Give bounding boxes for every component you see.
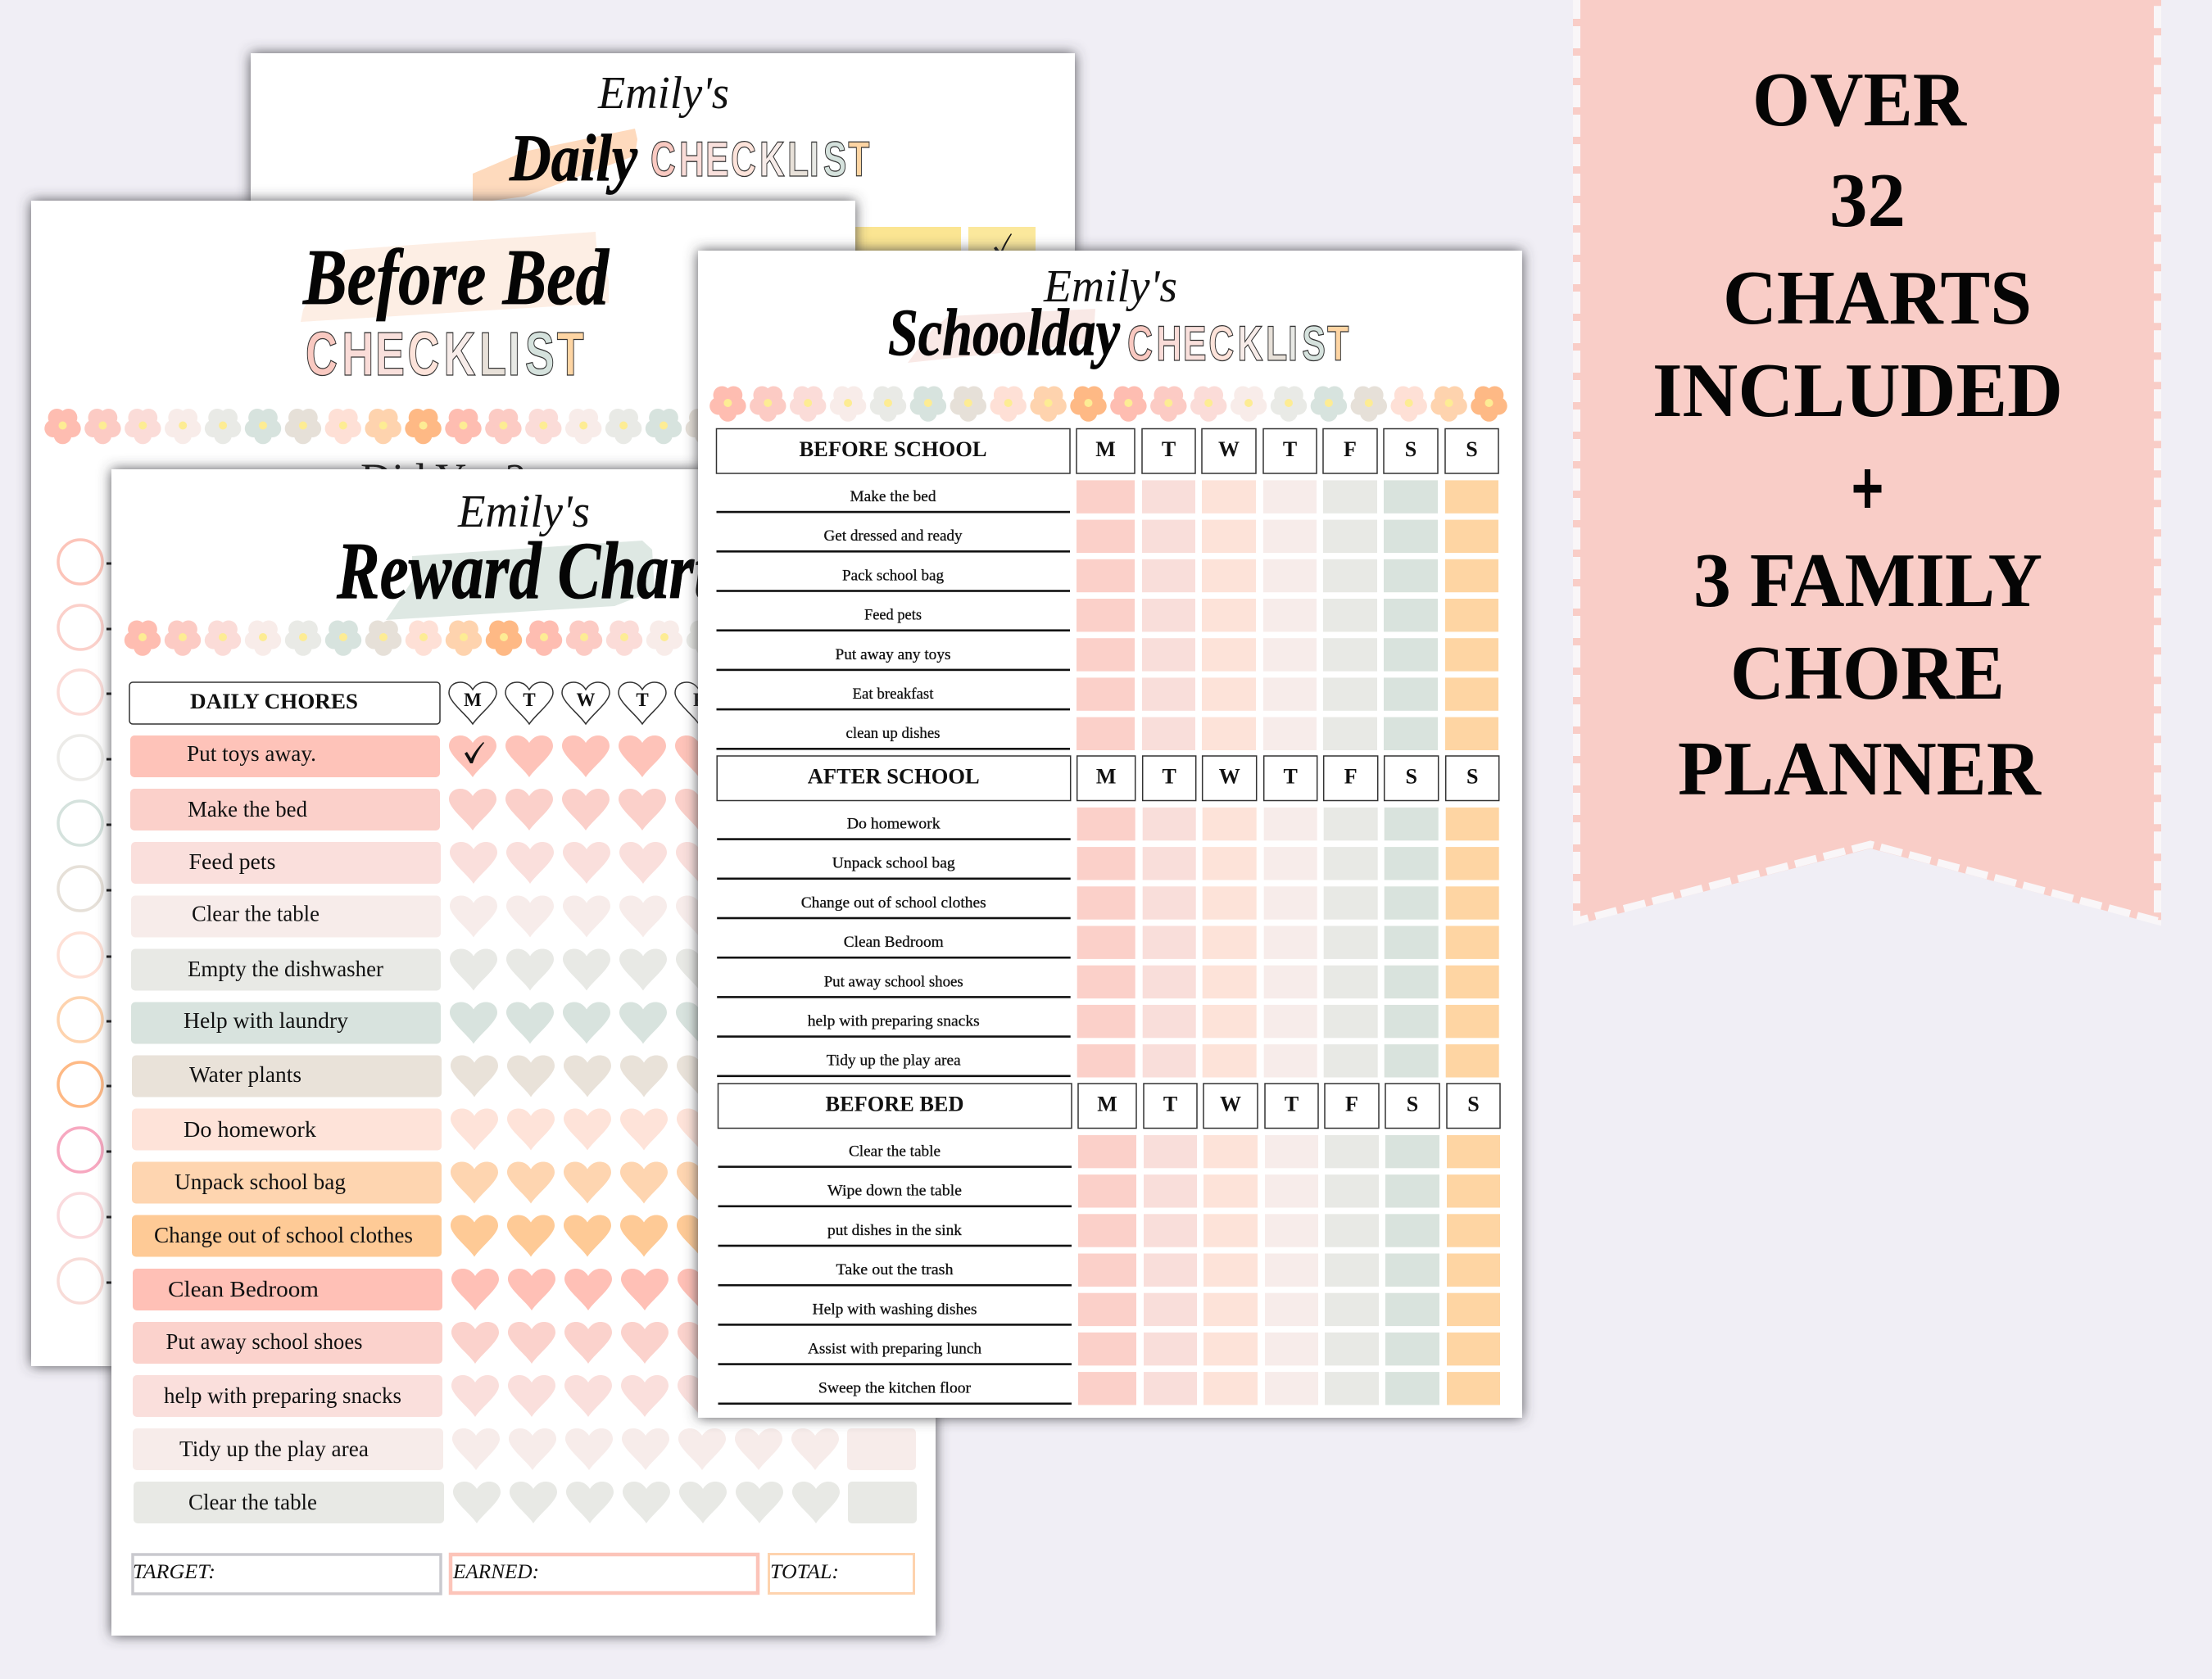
- flower border: Reward chart: [122, 617, 725, 656]
- sheet: Schoolday checklist: [698, 251, 1522, 1418]
- brush stroke: Before Bed: [301, 232, 609, 322]
- section: Before Bed: Assist with preparing lunch: [808, 1340, 981, 1358]
- section: Before School: M: [1095, 437, 1116, 461]
- row: Change out of school clothes: Change out of school clothes: [154, 1223, 413, 1247]
- row: Water plants: [132, 1055, 724, 1097]
- row: Clear the table (last): [134, 1482, 917, 1523]
- row: Do homework: Do homework: [184, 1117, 317, 1142]
- sheet: Daily checklist: [251, 53, 1075, 872]
- section: Before Bed: S: [1467, 1093, 1480, 1116]
- row: Change out of school clothes: [132, 1215, 724, 1256]
- ribbon text: +: [1852, 446, 1883, 532]
- ribbon text: CHARTS: [1723, 256, 2032, 341]
- section: After School: F: [1344, 765, 1358, 788]
- section: Before Bed: Sweep the kitchen floor: [818, 1380, 972, 1397]
- section: Before Bed: T: [1163, 1093, 1177, 1116]
- section: After School: Clean Bedroom: [844, 934, 944, 951]
- row: Put away school shoes: Put away school shoes: [165, 1329, 362, 1354]
- row: help with preparing snacks: [133, 1375, 725, 1417]
- heading: Reward Chart: Reward Chart: [336, 525, 714, 616]
- section: Before School: Pack school bag: [842, 567, 944, 584]
- section: After School: S: [1405, 765, 1417, 788]
- section: After School: W: [1219, 765, 1240, 788]
- section: Before School: S: [1466, 437, 1478, 461]
- section: Before Bed: [718, 1084, 1500, 1405]
- heading: Schoolday: Schoolday: [888, 295, 1120, 369]
- section: Before School: Feed pets: [864, 607, 922, 624]
- name: Emily's on Daily: Emily's: [597, 68, 729, 119]
- row: Empty the dishwasher: [131, 948, 723, 991]
- section: Before Bed: Clear the table: [849, 1143, 941, 1160]
- flower border: Schoolday: [707, 382, 1510, 422]
- section: Before School: T: [1162, 437, 1176, 461]
- section: After School: Change out of school clothes: [801, 894, 986, 912]
- ribbon banner: [1573, 0, 2161, 925]
- header: Daily chores: [129, 682, 440, 724]
- header cells: yellow: [854, 227, 1036, 260]
- heading: Checklist on Before Bed: CHECKLIST: [306, 319, 584, 388]
- section: After School: Do homework: [847, 816, 941, 832]
- ribbon text: INCLUDED: [1652, 348, 2063, 433]
- section: Before School: Put away any toys: [836, 646, 950, 663]
- section: Before Bed: W: [1220, 1093, 1241, 1116]
- row: Make the bed: Make the bed: [188, 797, 307, 821]
- row: Do homework: [132, 1109, 724, 1150]
- heading: Daily: Daily: [509, 120, 638, 195]
- subheading: Did You: Did You?: [360, 455, 525, 504]
- section: After School: T: [1284, 765, 1298, 788]
- heading: Before Bed: Before Bed: [302, 233, 610, 322]
- row: Feed pets: Feed pets: [188, 849, 275, 874]
- row: Clean Bedroom: Clean Bedroom: [168, 1277, 319, 1301]
- section: Before Bed: Take out the trash: [836, 1261, 954, 1278]
- box: Earned: EARNED:: [452, 1561, 539, 1583]
- heart day headers: W: [577, 690, 595, 710]
- ribbon text: [1652, 57, 2063, 812]
- section: After School: M: [1096, 765, 1116, 788]
- row: Make the bed: [130, 789, 723, 830]
- section: Before School: S: [1405, 437, 1416, 461]
- name: Emily's on Reward chart: Emily's: [457, 487, 590, 537]
- row: Clean Bedroom: [133, 1269, 725, 1310]
- section: Before Bed: put dishes in the sink: [827, 1222, 962, 1239]
- ribbon text: PLANNER: [1678, 726, 2042, 812]
- section: After School: S: [1466, 765, 1478, 788]
- flower border: Before Bed: [42, 405, 724, 444]
- row: Tidy up the play area: Tidy up the play area: [179, 1437, 369, 1461]
- section: Before Bed: BEFORE BED: [826, 1093, 963, 1116]
- row: Water plants: Water plants: [189, 1062, 301, 1087]
- brush stroke: Reward chart: [386, 541, 655, 620]
- section: Before School: T: [1283, 437, 1297, 461]
- box: Target: TARGET:: [133, 1561, 215, 1583]
- section: Before Bed: F: [1345, 1093, 1358, 1116]
- heading: Checklist on Schoolday: CHECKLIST: [1127, 317, 1349, 372]
- section: Before School: Get dressed and ready: [824, 527, 963, 545]
- section: Before School: BEFORE SCHOOL: [800, 437, 986, 461]
- row: Put toys away: [130, 735, 723, 777]
- row: Unpack school bag: Unpack school bag: [175, 1170, 346, 1194]
- row: Tidy up the play area: [133, 1428, 916, 1470]
- section: Before Bed: Wipe down the table: [827, 1183, 962, 1200]
- sheet: Reward chart: [111, 469, 936, 1636]
- heart day headers: T: [523, 690, 536, 710]
- section: After School: help with preparing snacks: [808, 1012, 980, 1030]
- heading: Checklist on Daily: CHECKLIST: [650, 133, 870, 188]
- section: After School: Unpack school bag: [832, 855, 955, 872]
- heart day headers: M: [464, 690, 482, 710]
- row: Feed pets: [131, 842, 723, 884]
- section: Before Bed: M: [1097, 1093, 1117, 1116]
- heart day headers: [449, 682, 723, 724]
- section: Before School: W: [1218, 437, 1240, 461]
- section: After School: [717, 756, 1499, 1078]
- section: After School: Tidy up the play area: [827, 1052, 961, 1070]
- heart day headers: T: [636, 690, 649, 710]
- section: After School: AFTER SCHOOL: [808, 765, 980, 788]
- row: Put away school shoes: [133, 1322, 725, 1364]
- section: Before School: clean up dishes: [845, 725, 941, 742]
- brush stroke: Daily: [473, 129, 637, 203]
- row: Put toys away: Put toys away.: [187, 741, 316, 766]
- section: Before School: F: [1344, 437, 1357, 461]
- section: Before School: Eat breakfast: [852, 686, 934, 703]
- row: Empty the dishwasher: Empty the dishwasher: [188, 957, 383, 981]
- box: Total: TOTAL:: [770, 1561, 839, 1583]
- section: After School: T: [1163, 765, 1176, 788]
- ribbon text: CHORE: [1730, 631, 2005, 716]
- sheet: Before Bed checklist: [31, 201, 855, 1366]
- header: Daily chores: DAILY CHORES: [190, 690, 358, 713]
- ribbon text: OVER: [1752, 57, 1967, 143]
- row: help with preparing snacks: help with preparing snacks: [164, 1383, 401, 1408]
- checklist circles: [58, 540, 115, 1303]
- row: Clear the table (last): Clear the table: [188, 1490, 317, 1514]
- ribbon text: 3 FAMILY: [1693, 538, 2042, 623]
- name: Emily's on Schoolday: Emily's: [1043, 261, 1177, 312]
- section: Before Bed: S: [1407, 1093, 1418, 1116]
- heart day headers: F: [693, 690, 705, 710]
- ribbon text: 32: [1829, 158, 1906, 243]
- brush stroke: Schoolday: [908, 309, 1095, 363]
- row: Clear the table: [131, 896, 723, 937]
- row: Help with laundry: [131, 1002, 723, 1043]
- section: Before School: Make the bed: [850, 488, 936, 505]
- box: Target: [133, 1555, 441, 1594]
- row: Unpack school bag: [132, 1161, 724, 1204]
- section: Before Bed: T: [1285, 1093, 1299, 1116]
- section: Before Bed: Help with washing dishes: [813, 1301, 977, 1318]
- box: Earned: [451, 1555, 758, 1593]
- box: Total: [768, 1555, 914, 1594]
- section: After School: Put away school shoes: [824, 973, 963, 990]
- section: Before School: [716, 429, 1498, 750]
- row: Clear the table: Clear the table: [192, 901, 320, 925]
- row: Help with laundry: Help with laundry: [184, 1008, 349, 1033]
